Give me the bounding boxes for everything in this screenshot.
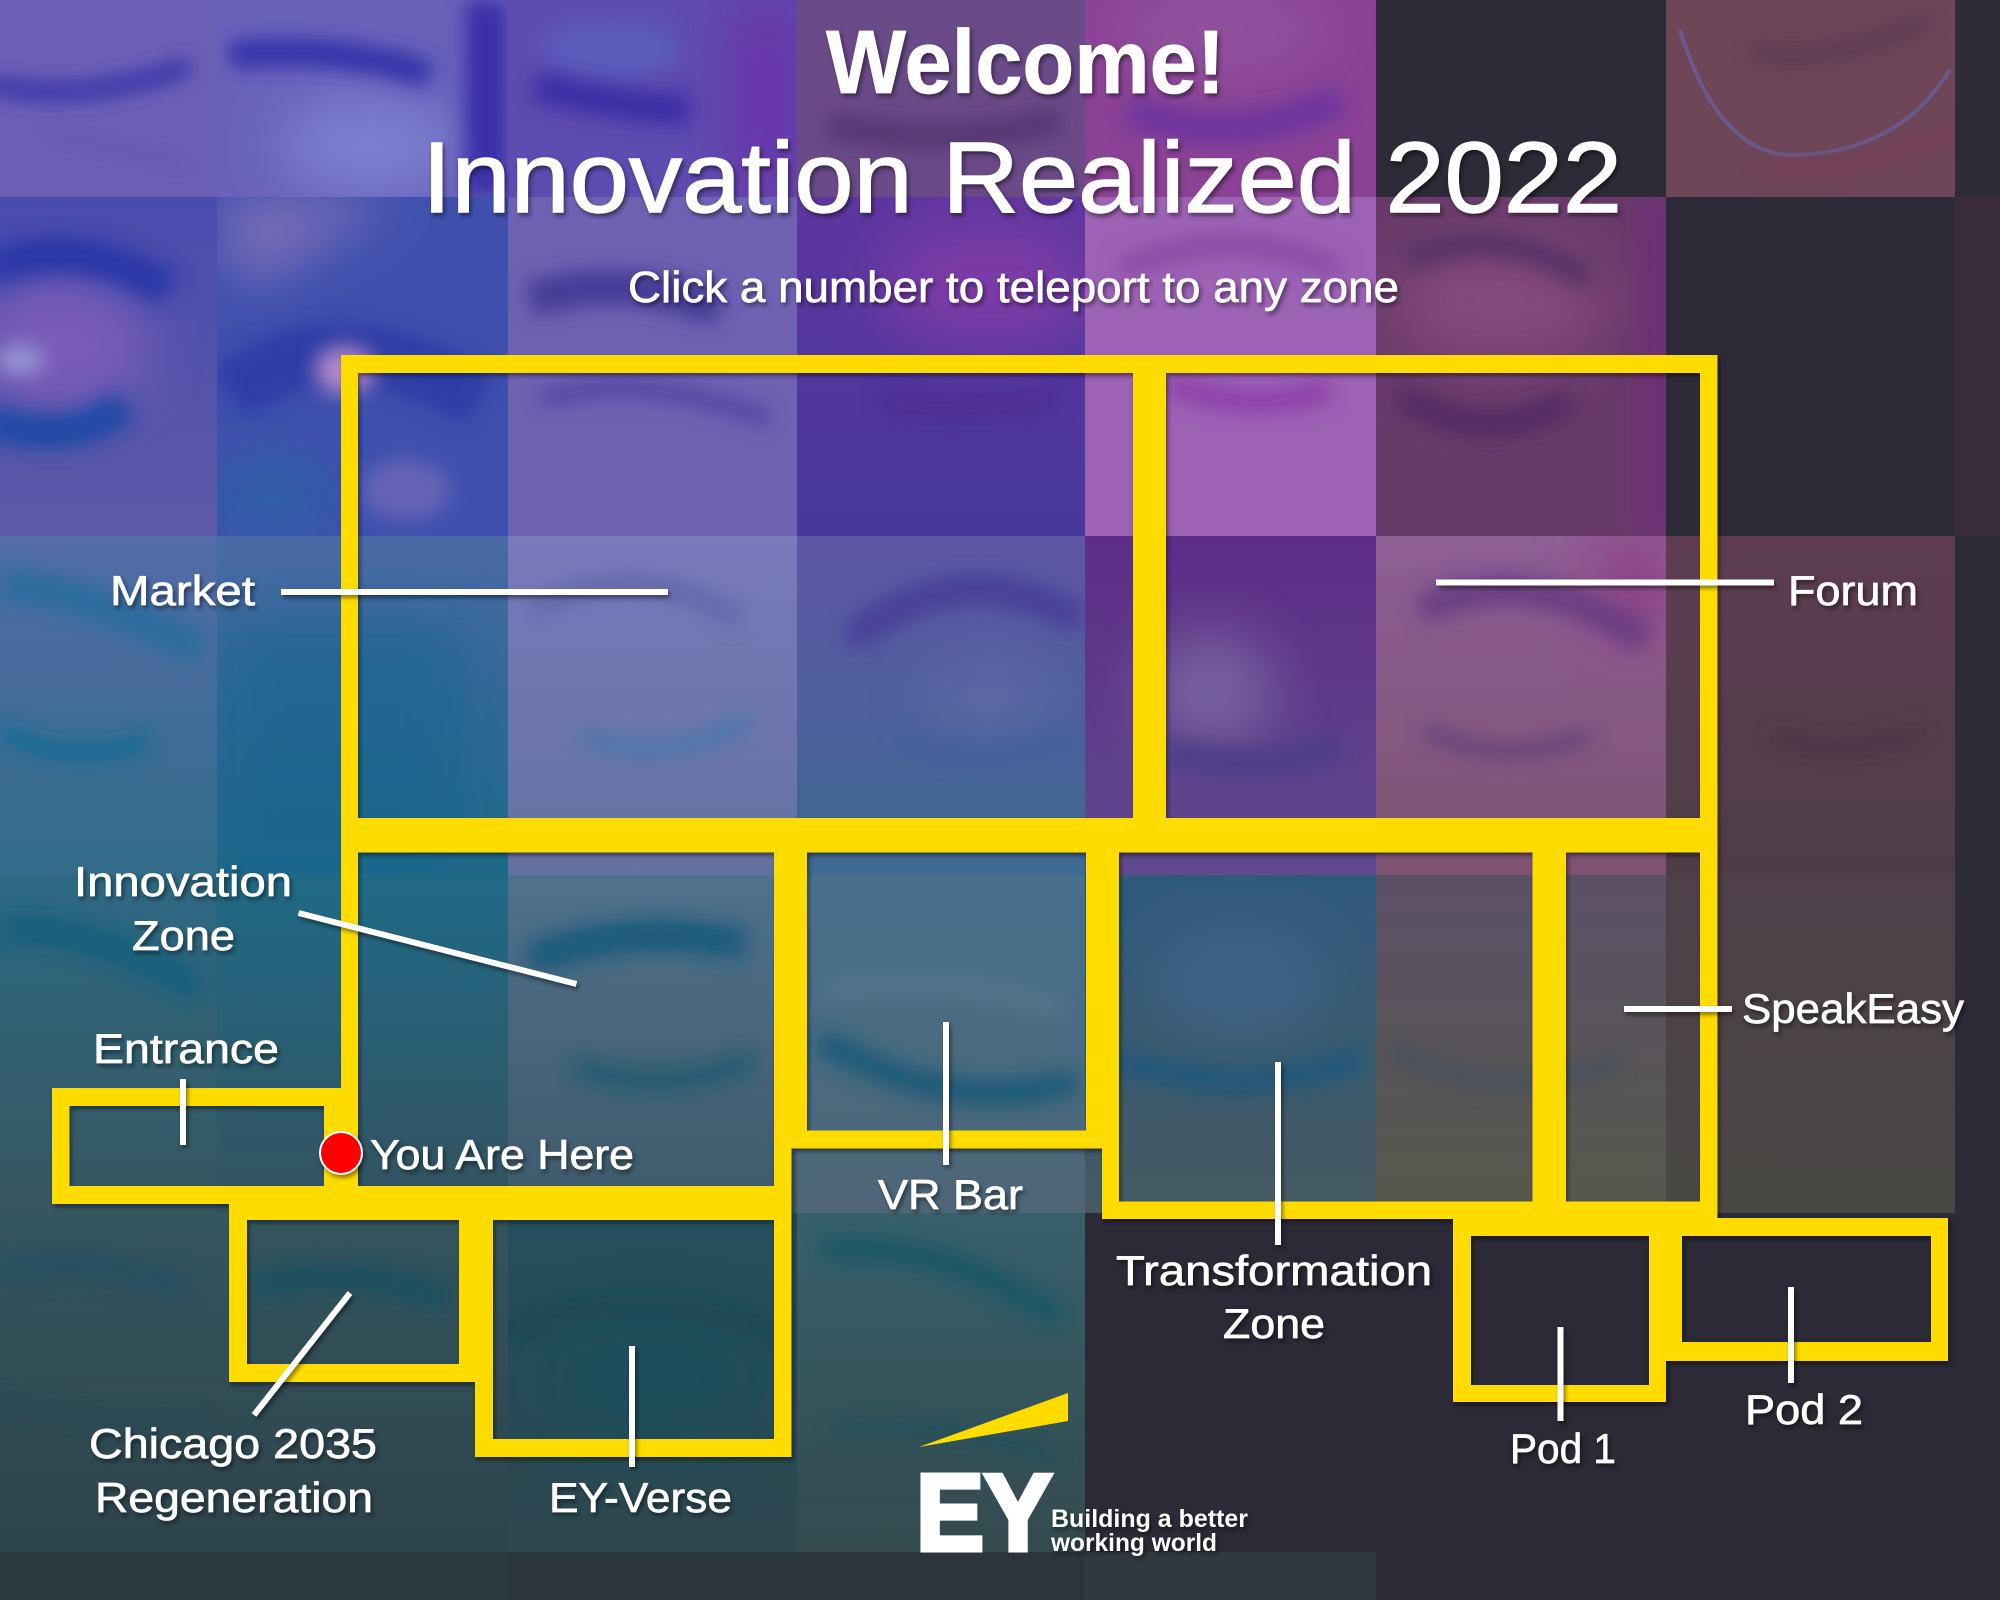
zone label: Pod 2: Pod 2 [1745,1386,1863,1433]
logo tagline: working world [1050,1529,1217,1557]
heading: welcome: Welcome! [826,13,1225,113]
tile row 1 [0,0,2000,197]
zone label: Innovation Zone: Zone [132,912,235,959]
zone label: Transformation Zone [1116,1062,1432,1347]
logo wordmark: EY [916,1452,1052,1574]
logo: EY [916,1393,1248,1574]
tile row 5 [0,1213,2000,1552]
zone label: Transformation Zone: Transformation [1116,1247,1432,1294]
tile row 6 [0,1552,2000,1600]
zone label: Pod 1: Pod 1 [1510,1425,1616,1472]
zone label: Entrance: Entrance [93,1025,279,1072]
tile row 2 [0,197,2000,536]
zone label: Chicago 2035 Regeneration: Regeneration [95,1474,373,1521]
zone label: Chicago 2035 Regeneration [89,1293,377,1521]
zone label: Forum: Forum [1788,567,1918,614]
tile row 3 [0,536,2000,875]
zone label: Innovation Zone [74,858,576,984]
logo tagline: Building a better [1051,1505,1248,1533]
zone label: SpeakEasy: SpeakEasy [1742,985,1964,1032]
heading: event name: Innovation Realized 2022 [422,122,1622,234]
zone label: Innovation Zone: Innovation [74,858,292,905]
subtitle: Click a number to teleport to any zone [628,263,1399,312]
zone label: VR Bar: VR Bar [878,1171,1023,1218]
title [422,13,1622,312]
marker: you are here: You Are Here [370,1131,634,1178]
floor plan outline with rooms [52,355,1948,1457]
tile row 4 [0,875,2000,1213]
zone label: Chicago 2035 Regeneration: Chicago 2035 [89,1420,377,1467]
zone label: Transformation Zone: Zone [1223,1300,1325,1347]
zone label: Market: Market [110,567,255,614]
logo tagline [1050,1505,1248,1557]
icon: yellow beam [919,1393,1068,1447]
zone label: EY-Verse: EY-Verse [549,1474,732,1521]
